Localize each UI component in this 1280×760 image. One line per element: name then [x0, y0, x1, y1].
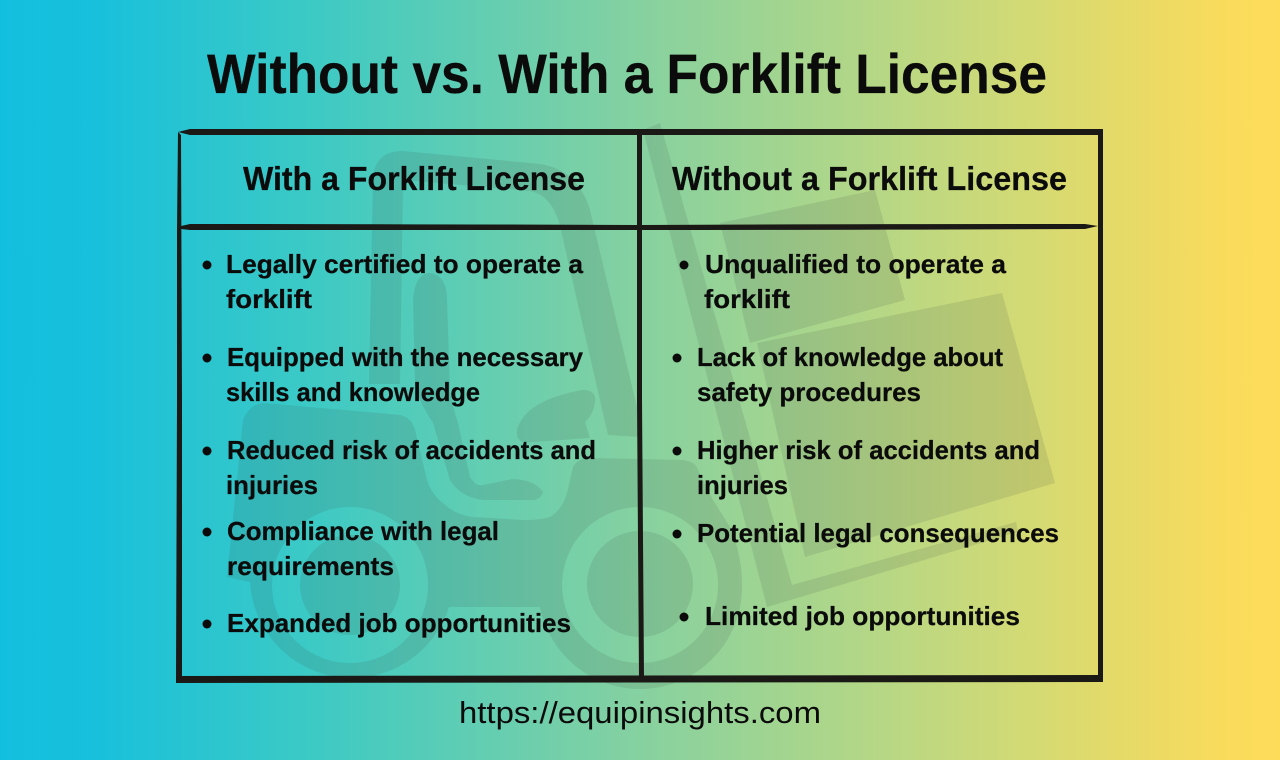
forklift mast and forks [643, 123, 1018, 607]
left border [176, 132, 182, 683]
bullet 2: safety procedures [697, 377, 921, 407]
right border [1098, 130, 1103, 682]
bullet 1 [202, 249, 584, 314]
left wheel hub [300, 535, 400, 635]
bullet 3: Reduced risk of accidents and [227, 435, 596, 465]
forklift cab frame [369, 151, 640, 437]
column header: without a license: Without a Forklift License [672, 160, 1067, 197]
bullet 3: Higher risk of accidents and [697, 435, 1040, 465]
forklift seat back [413, 273, 543, 500]
bullet 3 [202, 435, 596, 500]
header divider [181, 224, 1098, 230]
bullet 2 [672, 342, 1003, 407]
bullet 1 [680, 249, 1007, 314]
bullet 4: requirements [227, 551, 394, 581]
bullet 5: Limited job opportunities [705, 601, 1020, 631]
list: with a license [202, 249, 596, 638]
forklift body [227, 403, 742, 689]
forklift steering wheel [517, 390, 595, 442]
title: Without vs. With a Forklift License [207, 42, 1047, 105]
bullet 2: skills and knowledge [226, 377, 480, 407]
column header: with a license: With a Forklift License [243, 160, 585, 197]
bullet 4 [202, 516, 499, 581]
bullet 4: Compliance with legal [227, 516, 499, 546]
column divider [637, 131, 644, 678]
bullet 2: Lack of knowledge about [697, 342, 1003, 372]
list: without a license [672, 249, 1059, 631]
bullet 2: Equipped with the necessary [227, 342, 584, 372]
bullet 3: injuries [697, 470, 788, 500]
footer url: https://equipinsights.com [459, 695, 821, 730]
top border [178, 129, 1103, 135]
bullet 1: forklift [704, 284, 790, 314]
bullet 3 [672, 435, 1040, 500]
bullet 2 [202, 342, 584, 407]
bullet 3: injuries [226, 470, 318, 500]
lower load box [757, 293, 1055, 557]
bullet 4: Potential legal consequences [697, 518, 1059, 548]
bullet 1: Legally certified to operate a [226, 249, 584, 279]
watermark: forklift illustration [227, 123, 1055, 689]
right wheel hub [587, 531, 693, 637]
upper load box [720, 190, 905, 343]
bullet 5: Expanded job opportunities [227, 608, 571, 638]
bullet 1: Unqualified to operate a [705, 249, 1007, 279]
bullet 1: forklift [226, 284, 312, 314]
bottom border [176, 675, 1103, 683]
table frame [176, 129, 1103, 683]
